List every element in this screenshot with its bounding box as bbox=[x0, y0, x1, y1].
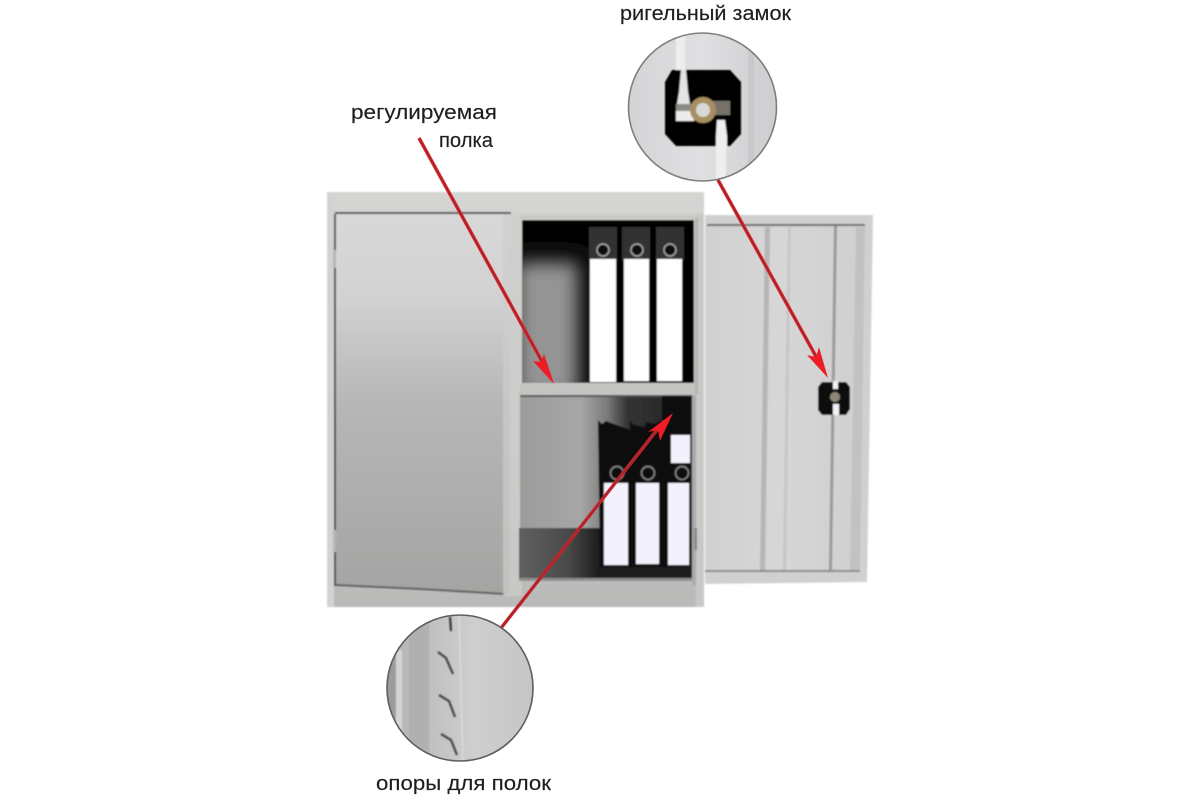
support slot bbox=[438, 652, 453, 674]
support slot bbox=[439, 695, 455, 717]
label: shelf supports: опоры для полок bbox=[376, 772, 552, 795]
lower compartment bbox=[519, 395, 697, 585]
arrow: adjustable shelf bbox=[419, 138, 554, 384]
door lock bbox=[818, 381, 850, 415]
label: adjustable shelf: регулируемая bbox=[351, 101, 497, 124]
cabinet body bbox=[327, 192, 873, 607]
adjustable shelf bbox=[520, 384, 695, 395]
label: adjustable shelf bbox=[351, 101, 497, 152]
cabinet frame bbox=[327, 192, 704, 607]
arrow: bolt lock bbox=[718, 180, 828, 378]
folder 3 bbox=[656, 227, 684, 381]
folder 2 bbox=[622, 227, 650, 381]
magnifier: bolt lock bbox=[628, 30, 776, 190]
upper compartment bbox=[516, 215, 698, 397]
right door bbox=[705, 215, 873, 584]
support slot bbox=[441, 734, 457, 755]
arrow: shelf supports bbox=[501, 413, 673, 628]
lower folders bbox=[598, 420, 690, 567]
folder 1 bbox=[589, 227, 617, 382]
label: adjustable shelf: полка bbox=[439, 129, 494, 152]
label: bolt lock: ригельный замок bbox=[620, 2, 792, 25]
magnifier: shelf supports bbox=[387, 615, 533, 765]
support slot bbox=[450, 617, 451, 631]
left door bbox=[333, 214, 522, 596]
